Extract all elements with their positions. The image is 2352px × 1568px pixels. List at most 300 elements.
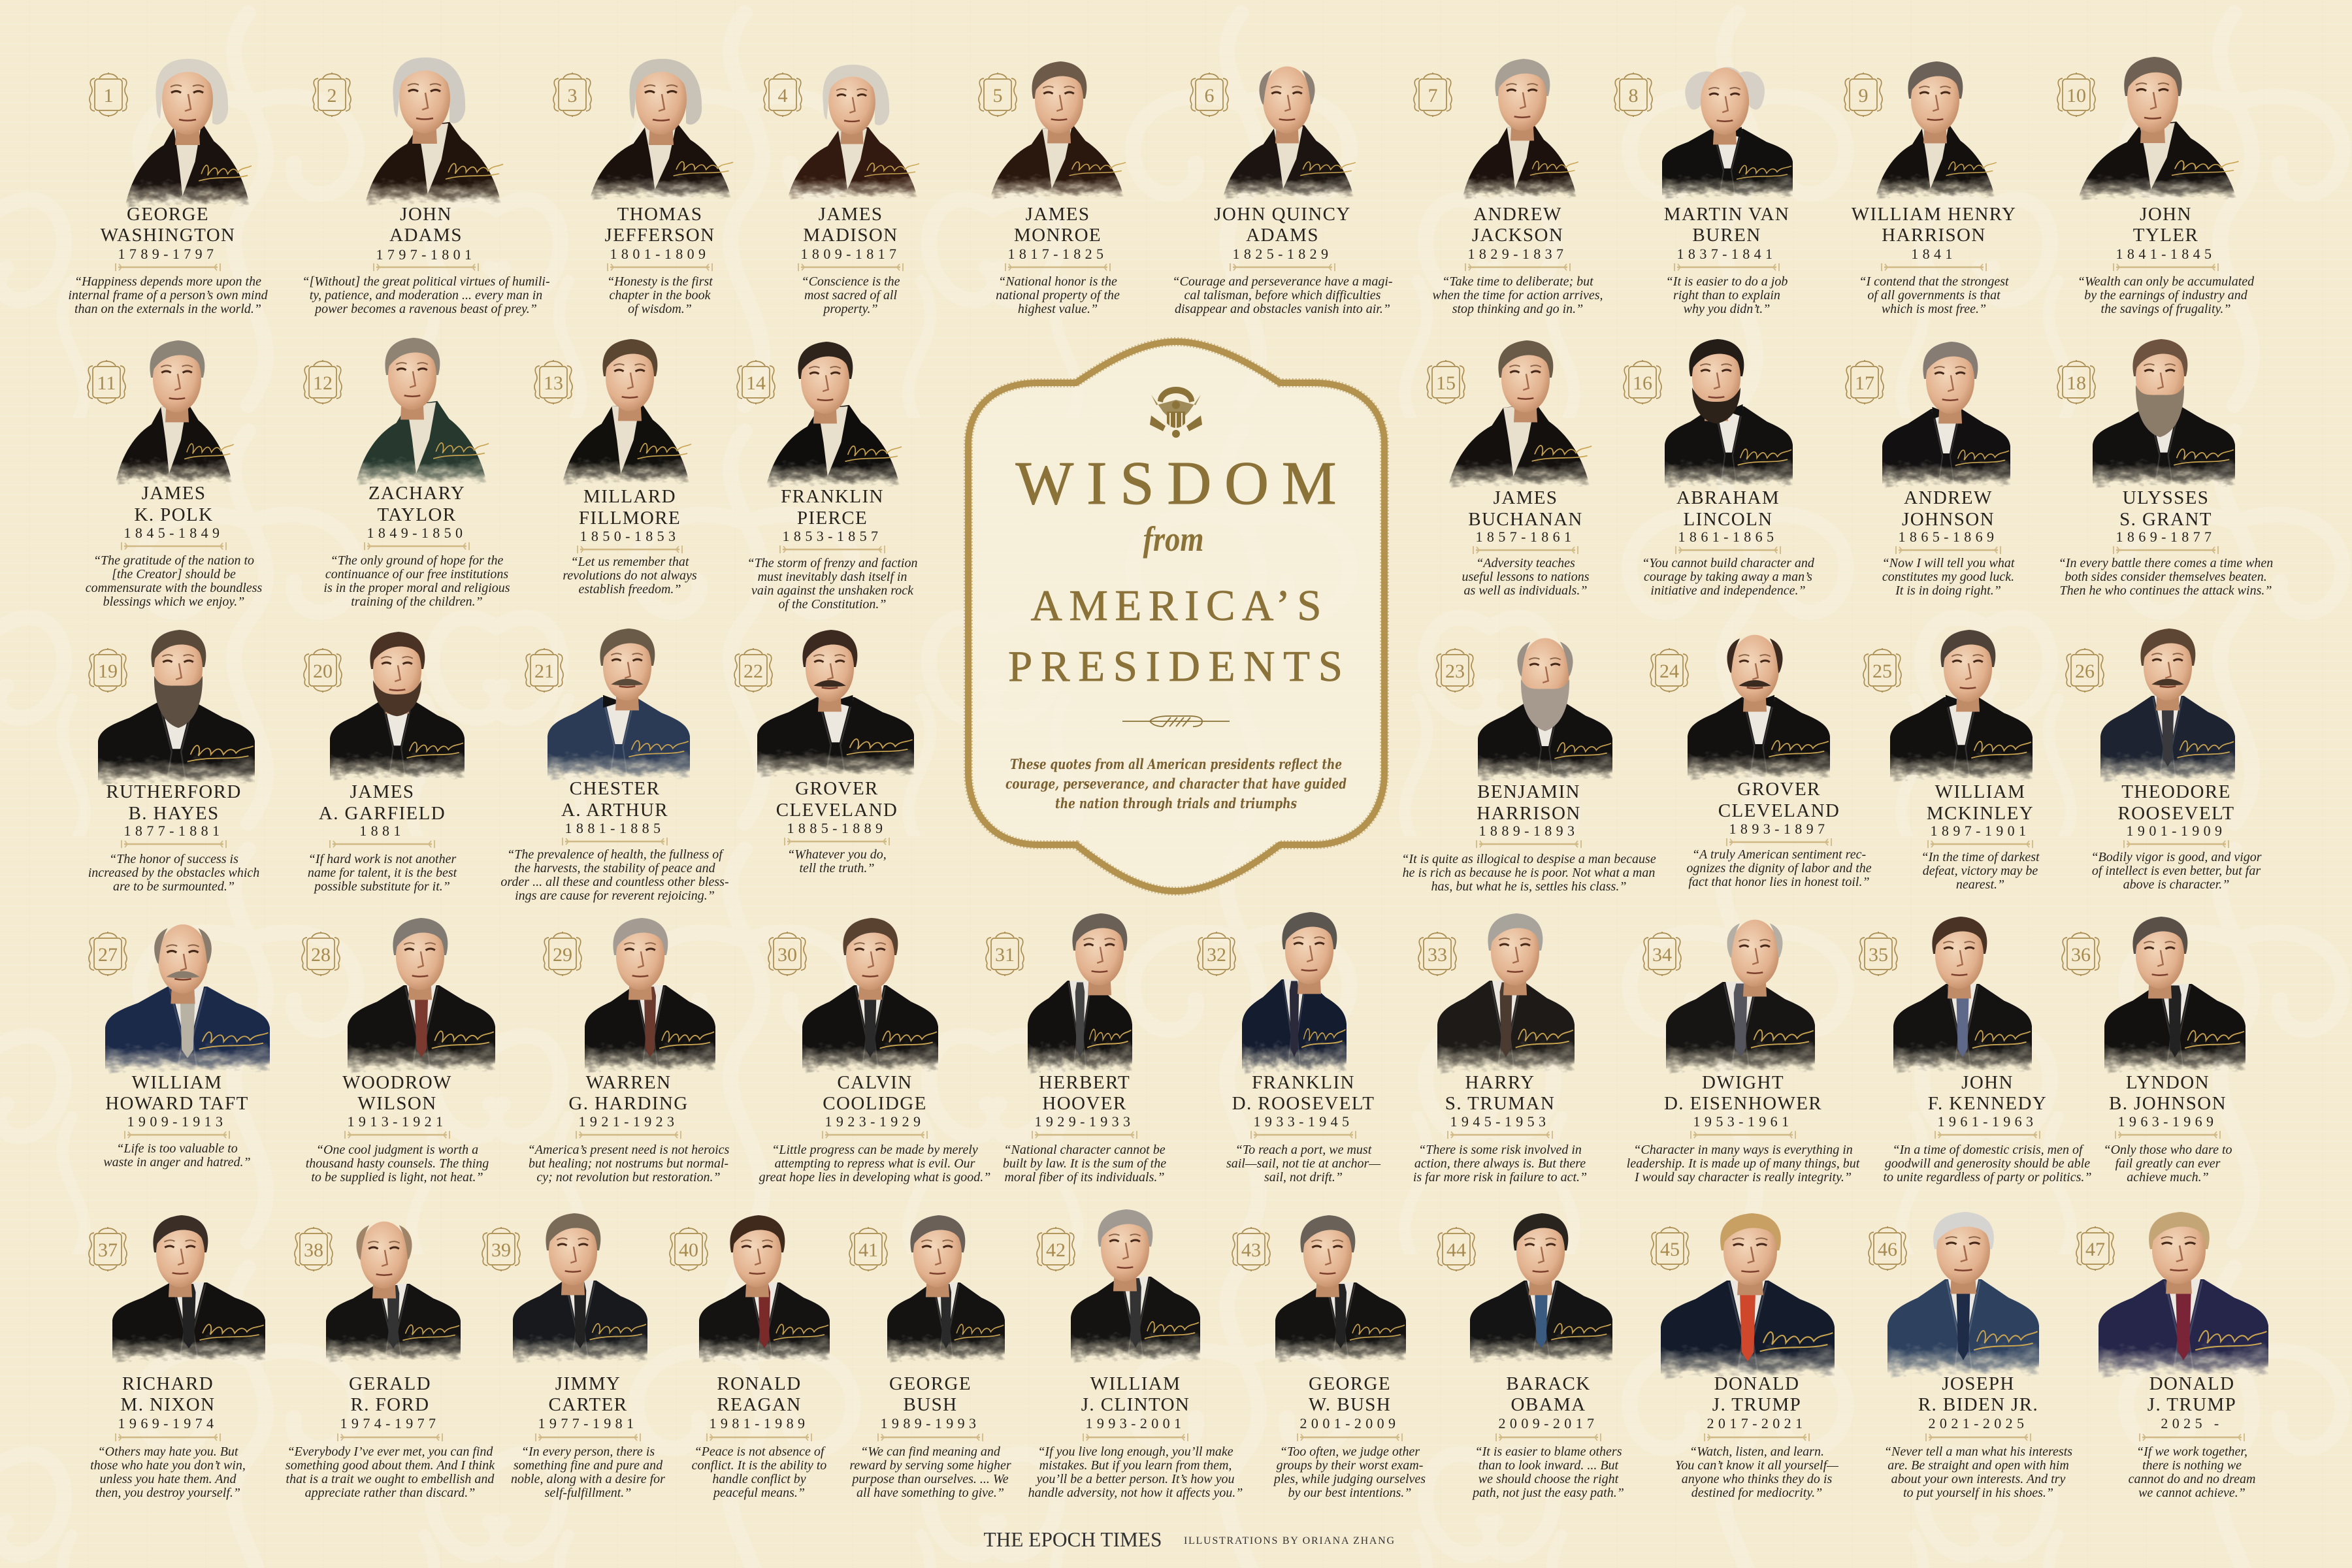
quote: than on the externals in the world.”	[74, 302, 261, 316]
quote: those who hate you don’t win,	[90, 1458, 246, 1473]
quote: ples, while judging ourselves	[1273, 1472, 1426, 1486]
number badge	[1643, 932, 1681, 976]
quote: I would say character is really integrity.”	[1634, 1170, 1852, 1184]
portrait	[1470, 1213, 1612, 1364]
panel: president 13 Millard Fillmore	[534, 339, 697, 596]
years: 1850-1853	[580, 528, 679, 544]
years: 1865-1869	[1899, 529, 1998, 545]
name: D. EISENHOWER	[1664, 1093, 1822, 1114]
quote: Then he who continues the attack wins.”	[2060, 583, 2272, 598]
name: MCKINLEY	[1927, 803, 2034, 824]
quote: right than to explain	[1673, 288, 1780, 302]
years: 1963-1969	[2118, 1113, 2217, 1130]
portrait	[98, 630, 255, 785]
number badge: 45	[1660, 1239, 1680, 1260]
number badge: 14	[746, 372, 766, 394]
number badge: 23	[1445, 661, 1465, 682]
title: AMERICA'S: AMERICA’S	[1031, 581, 1321, 630]
panel: president 40 Ronald Reagan	[670, 1215, 830, 1500]
name: WILLIAM	[1935, 781, 2025, 802]
name: DONALD	[1714, 1373, 1799, 1394]
quote: establish freedom.”	[578, 582, 681, 596]
description text: These quotes from all American presidents reflect the	[1010, 756, 1342, 772]
name: R. FORD	[350, 1394, 430, 1415]
divider	[1926, 1433, 2031, 1441]
number badge	[1436, 648, 1474, 693]
name: ADAMS	[389, 225, 463, 246]
number badge: 3	[567, 85, 578, 106]
quote: “If hard work is not another	[308, 852, 456, 866]
years: 1923-1929	[825, 1113, 924, 1130]
name: WASHINGTON	[101, 225, 235, 246]
panel: president 11 James K. Polk	[86, 340, 262, 609]
number badge	[90, 73, 127, 117]
quote: “Others may hate you. But	[98, 1445, 238, 1459]
portrait	[348, 918, 495, 1074]
name: ZACHARY	[368, 483, 465, 504]
quote: “Never tell a man what his interests	[1884, 1445, 2072, 1459]
number badge: 13	[544, 372, 563, 394]
title: WISDOM: WISDOM	[1015, 449, 1337, 517]
years: 1981-1989	[710, 1415, 809, 1431]
quote: to be supplied is light, not heat.”	[311, 1170, 483, 1184]
quote: of intellect is even better, but far	[2092, 864, 2261, 878]
quote: “Take time to deliberate; but	[1442, 274, 1593, 289]
panel: president 47 Donald J. Trump	[2076, 1212, 2268, 1500]
number badge: 25	[1872, 661, 1892, 682]
name: MARTIN VAN	[1664, 204, 1789, 225]
quote: “To reach a port, we must	[1235, 1143, 1371, 1157]
quote: which is most free.”	[1882, 302, 1986, 316]
portrait	[355, 338, 489, 486]
name: HARRISON	[1882, 225, 1986, 246]
name: WILLIAM	[132, 1072, 222, 1093]
name: TAYLOR	[377, 504, 457, 525]
portrait	[2093, 339, 2235, 489]
portrait	[330, 632, 465, 781]
number badge: 35	[1869, 944, 1888, 966]
panel: president 10 John Tyler	[2057, 57, 2255, 316]
panel: president 5 James Monroe	[979, 61, 1126, 316]
name: R. BIDEN JR.	[1918, 1394, 2038, 1415]
divider	[1928, 840, 2033, 848]
name: JOHN	[1961, 1072, 2014, 1093]
divider	[878, 1433, 983, 1441]
years: 1901-1909	[2127, 823, 2226, 839]
name: F. KENNEDY	[1928, 1093, 2047, 1114]
panel: president 17 Andrew Johnson	[1846, 342, 2015, 598]
quote: you’ll be a better person. It’s how you	[1036, 1472, 1234, 1486]
portrait	[699, 1215, 830, 1364]
number badge	[304, 360, 342, 404]
name: S. TRUMAN	[1445, 1093, 1555, 1114]
name: JOHNSON	[1902, 509, 1995, 530]
quote: “Courage and perseverance have a magi-	[1172, 274, 1393, 289]
quote: there is nothing we	[2142, 1458, 2242, 1473]
portrait	[1462, 59, 1578, 200]
quote: by our best intentions.”	[1288, 1486, 1411, 1500]
name: M. NIXON	[121, 1394, 215, 1415]
quote: leadership. It is made up of many things, but	[1627, 1156, 1860, 1171]
number badge: 41	[858, 1239, 878, 1261]
quote: groups by their worst exam-	[1277, 1458, 1423, 1473]
panel: president 23 Benjamin Harrison	[1401, 638, 1656, 894]
quote: “A truly American sentiment rec-	[1692, 847, 1866, 862]
quote: useful lessons to nations	[1462, 570, 1590, 584]
name: GROVER	[795, 778, 879, 799]
name: A. GARFIELD	[319, 803, 446, 824]
quote: sail, not drift.”	[1264, 1170, 1343, 1184]
quote: revolutions do not always	[563, 568, 697, 583]
panel: president 30 Calvin Coolidge	[759, 918, 990, 1184]
footer	[984, 1527, 1394, 1551]
name: GROVER	[1737, 779, 1821, 800]
quote: self-fulfillment.”	[545, 1486, 631, 1500]
name: WOODROW	[342, 1072, 452, 1093]
name: FILLMORE	[579, 508, 681, 529]
years: 2021-2025	[1929, 1415, 2028, 1431]
quote: “Conscience is the	[801, 274, 900, 289]
number badge	[737, 360, 775, 404]
divider	[1935, 1131, 2040, 1139]
number badge	[482, 1227, 520, 1271]
panel: president 4 James Madison	[764, 65, 919, 316]
quote: above is character.”	[2123, 877, 2229, 892]
number badge: 16	[1633, 372, 1652, 394]
number badge: 8	[1628, 85, 1639, 106]
quote: built by law. It is the sum of the	[1003, 1156, 1166, 1171]
panel: president 39 Jimmy Carter	[482, 1213, 665, 1500]
divider	[536, 1433, 640, 1441]
title: PRESIDENTS: PRESIDENTS	[1008, 642, 1343, 691]
quote: handle conflict by	[712, 1472, 806, 1486]
panel: president 34 Dwight D. Eisenhower	[1627, 920, 1860, 1184]
quote: action, there always is. But there	[1414, 1156, 1586, 1171]
name: BUSH	[904, 1394, 957, 1415]
quote: chapter in the book	[610, 288, 711, 302]
number badge: 1	[103, 85, 114, 106]
years: 1961-1963	[1938, 1113, 2037, 1130]
divider	[1465, 263, 1570, 271]
quote: “If you live long enough, you’ll make	[1037, 1445, 1233, 1459]
name: RONALD	[717, 1373, 802, 1394]
portrait	[1275, 1215, 1406, 1364]
quote: “In the time of darkest	[1921, 850, 2040, 864]
number badge	[1427, 360, 1465, 404]
years: 1809-1817	[801, 246, 900, 262]
number badge	[2057, 360, 2095, 404]
divider	[563, 838, 667, 845]
flourish divider	[1122, 716, 1230, 727]
years: 1921-1923	[579, 1113, 678, 1130]
number badge: 43	[1241, 1239, 1261, 1261]
number badge	[304, 648, 342, 693]
divider	[1448, 1131, 1552, 1139]
number badge: 33	[1428, 944, 1447, 966]
portrait	[1071, 1209, 1200, 1364]
quote: unless you hate them. And	[99, 1472, 237, 1486]
name: THEODORE	[2121, 781, 2231, 802]
quote: defeat, victory may be	[1923, 864, 2038, 878]
number badge	[313, 73, 351, 117]
years: 1933-1945	[1254, 1113, 1353, 1130]
number badge	[534, 360, 572, 404]
name: K. POLK	[135, 504, 213, 525]
name: FRANKLIN	[1252, 1072, 1355, 1093]
quote: “Everybody I’ve ever met, you can find	[287, 1445, 493, 1459]
years: 1881-1885	[565, 820, 664, 836]
number badge	[1846, 360, 1884, 404]
panel: president 6 John Quincy Adams	[1172, 67, 1393, 316]
divider	[1691, 1131, 1795, 1139]
quote: “We can find meaning and	[860, 1445, 1000, 1459]
panel: president 46 Joseph R. Biden Jr.	[1869, 1212, 2072, 1500]
divider	[1896, 546, 2001, 554]
portrait	[1437, 913, 1575, 1075]
number badge	[302, 932, 340, 976]
panel: president 9 William Henry Harrison	[1844, 61, 2016, 316]
quote: ty, patience, and moderation ... every man in	[310, 288, 542, 302]
quote: cy; not revolution but restoration.”	[536, 1170, 721, 1184]
years: 1877-1881	[124, 823, 223, 839]
years: 1825-1829	[1233, 246, 1332, 262]
number badge	[553, 73, 591, 117]
icon: presidential seal	[1150, 387, 1202, 438]
quote: “It is quite as illogical to despise a man because	[1401, 852, 1656, 866]
portrait	[757, 630, 914, 778]
quote: “Adversity teaches	[1476, 556, 1575, 570]
quote: that is a trait we ought to embellish and	[286, 1472, 495, 1486]
quote: “National character cannot be	[1004, 1143, 1166, 1157]
quote: sail—sail, not tie at anchor—	[1226, 1156, 1380, 1171]
panel: president 19 Rutherford B. Hayes	[88, 630, 259, 894]
portrait	[562, 339, 691, 486]
quote: name for talent, it is the best	[308, 866, 457, 880]
name: S. GRANT	[2119, 509, 2212, 530]
portrait	[105, 924, 270, 1075]
panel: president 12 Zachary Taylor	[304, 338, 510, 609]
name: BUCHANAN	[1468, 509, 1583, 530]
number badge	[986, 932, 1024, 976]
years: 1841-1845	[2116, 246, 2215, 262]
portrait	[1875, 61, 1997, 200]
divider	[1676, 546, 1780, 554]
quote: “The honor of success is	[109, 852, 238, 866]
panel: title cartouche	[968, 342, 1384, 891]
quote: handle adversity, not how it affects you.”	[1028, 1486, 1243, 1500]
name: DWIGHT	[1702, 1072, 1784, 1093]
quote: courage by taking away a man’s	[1644, 570, 1812, 584]
panel: president 33 Harry S. Truman	[1413, 913, 1587, 1184]
name: LYNDON	[2126, 1072, 2210, 1093]
quote: “[Without] the great political virtues of humili-	[302, 274, 550, 289]
quote: You can’t know it all yourself—	[1675, 1458, 1838, 1473]
years: 1869-1877	[2116, 529, 2215, 545]
panel: president 20 James A. Garfield	[304, 632, 465, 894]
number badge	[2057, 73, 2095, 117]
name: BENJAMIN	[1477, 781, 1580, 802]
years: 1974-1977	[340, 1415, 440, 1431]
name: LINCOLN	[1683, 509, 1773, 530]
name: BUREN	[1692, 225, 1761, 246]
number badge: 40	[679, 1239, 698, 1261]
name: WARREN	[586, 1072, 671, 1093]
number badge	[2066, 648, 2104, 693]
divider	[1674, 263, 1779, 271]
divider	[1230, 263, 1335, 271]
name: WILSON	[357, 1093, 437, 1114]
number badge: 44	[1446, 1239, 1466, 1261]
panel: president 38 Gerald R. Ford	[286, 1222, 495, 1500]
quote: are to be surmounted.”	[113, 879, 235, 894]
divider	[2115, 1131, 2220, 1139]
years: 1801-1809	[610, 246, 710, 262]
divider	[785, 838, 889, 845]
number badge	[768, 932, 806, 976]
quote: the harvests, the stability of peace and	[514, 861, 716, 875]
quote: blessings which we enjoy.”	[103, 595, 244, 609]
quote: path, not just the easy path.”	[1471, 1486, 1624, 1500]
name: GEORGE	[127, 204, 209, 225]
panel: president 31 Herbert Hoover	[986, 913, 1166, 1184]
panel: president 22 Grover Cleveland	[734, 630, 914, 875]
number badge: 22	[743, 661, 763, 682]
portrait	[112, 1215, 265, 1364]
years: 1845-1849	[124, 525, 223, 541]
quote: national property of the	[996, 288, 1120, 302]
quote: is far more risk in failure to act.”	[1413, 1170, 1587, 1184]
quote: increased by the obstacles which	[88, 866, 259, 880]
quote: stop thinking and go in.”	[1452, 302, 1583, 316]
name: JAMES	[142, 483, 206, 504]
name: ABRAHAM	[1676, 487, 1780, 508]
number badge	[1037, 1227, 1075, 1271]
number badge: 4	[777, 85, 788, 106]
panel: president 26 Theodore Roosevelt	[2066, 629, 2262, 892]
quote: training of the children.”	[351, 595, 483, 609]
divider	[2114, 546, 2218, 554]
number badge: 38	[304, 1239, 323, 1261]
portrait	[1890, 630, 2033, 783]
panel: president 25 William McKinley	[1863, 630, 2040, 892]
number badge	[2076, 1226, 2114, 1271]
quote: “You cannot build character and	[1642, 556, 1814, 570]
name: GERALD	[349, 1373, 431, 1394]
number badge	[734, 648, 772, 693]
quote: has, but what he is, settles his class.”	[1431, 879, 1626, 894]
number badge	[1863, 648, 1901, 693]
number badge	[1418, 932, 1456, 976]
years: 1797-1801	[376, 246, 476, 263]
name: JEFFERSON	[605, 225, 715, 246]
quote: cal talisman, before which difficulties	[1184, 288, 1381, 302]
years: 1849-1850	[367, 525, 466, 541]
quote: achieve much.”	[2127, 1170, 2209, 1184]
name: BARACK	[1506, 1373, 1591, 1394]
years: 1969-1974	[118, 1415, 218, 1431]
quote: “America’s present need is not heroics	[528, 1143, 729, 1157]
years: 1913-1921	[348, 1113, 447, 1130]
quote: “Little progress can be made by merely	[772, 1143, 978, 1157]
portrait	[1893, 917, 2032, 1074]
number badge: 31	[995, 944, 1015, 966]
divider	[122, 542, 226, 550]
quote: order ... all these and countless other bless-	[500, 875, 729, 889]
divider	[365, 542, 469, 550]
name: WILLIAM HENRY	[1852, 204, 2016, 225]
quote: commensurate with the boundless	[86, 581, 262, 595]
number badge	[88, 360, 125, 404]
name: JAMES	[350, 781, 414, 802]
number badge: 19	[98, 661, 118, 682]
panel: president 27 William Howard Taft	[89, 924, 270, 1169]
quote: property.”	[822, 302, 878, 316]
quote: “Life is too valuable to	[116, 1141, 238, 1156]
quote: It is in doing right.”	[1895, 583, 2001, 598]
divider	[1005, 263, 1110, 271]
panel: president 24 Grover Cleveland	[1650, 635, 1872, 889]
name: DONALD	[2149, 1373, 2234, 1394]
number badge: 32	[1207, 944, 1226, 966]
quote: then, you destroy yourself.”	[95, 1486, 240, 1500]
quote: “Only those who dare to	[2103, 1143, 2232, 1157]
divider	[798, 263, 903, 271]
years: 1853-1857	[783, 528, 882, 544]
number badge: 10	[2066, 85, 2086, 106]
divider	[1705, 1433, 1809, 1441]
panel: president 2 John Adams	[302, 57, 550, 316]
portrait	[887, 1215, 1005, 1364]
number badge: 27	[98, 944, 118, 966]
number badge	[544, 932, 581, 976]
years: 1829-1837	[1468, 246, 1567, 262]
number badge: 11	[97, 372, 116, 394]
portrait	[1242, 912, 1347, 1075]
quote: cannot do and no dream	[2129, 1472, 2255, 1486]
portrait	[1662, 67, 1793, 200]
quote: but healing; not nostrums but normal-	[529, 1156, 728, 1171]
number badge: 21	[534, 661, 554, 682]
name: CHESTER	[570, 778, 660, 799]
years: 1837-1841	[1677, 246, 1776, 262]
name: HARRISON	[1477, 803, 1581, 824]
name: THOMAS	[617, 204, 702, 225]
quote: “It is easier to do a job	[1666, 274, 1788, 289]
number badge	[89, 1227, 127, 1271]
name: MADISON	[803, 225, 898, 246]
quote: tell the truth.”	[800, 861, 874, 875]
quote: “In a time of domestic crisis, men of	[1892, 1143, 2083, 1157]
quote: thousand hasty counsels. The thing	[306, 1156, 489, 1171]
quote: nearest.”	[1956, 877, 2004, 892]
quote: attempting to repress what is evil. Our	[775, 1156, 975, 1171]
name: JACKSON	[1472, 225, 1563, 246]
portrait	[1661, 1213, 1835, 1380]
divider	[374, 263, 478, 271]
quote: by the earnings of industry and	[2084, 288, 2248, 302]
panel: president 1 George Washington	[68, 59, 269, 316]
quote: “Too often, we judge other	[1280, 1445, 1420, 1459]
divider	[780, 546, 885, 553]
divider	[2140, 1433, 2244, 1441]
name: JOSEPH	[1942, 1373, 2015, 1394]
number badge: 5	[993, 85, 1002, 106]
number badge: 34	[1652, 944, 1672, 966]
quote: of all governments is that	[1867, 288, 2001, 302]
quote: “The only ground of hope for the	[331, 553, 503, 568]
portrait	[1666, 920, 1815, 1075]
years: 1817-1825	[1008, 246, 1107, 262]
